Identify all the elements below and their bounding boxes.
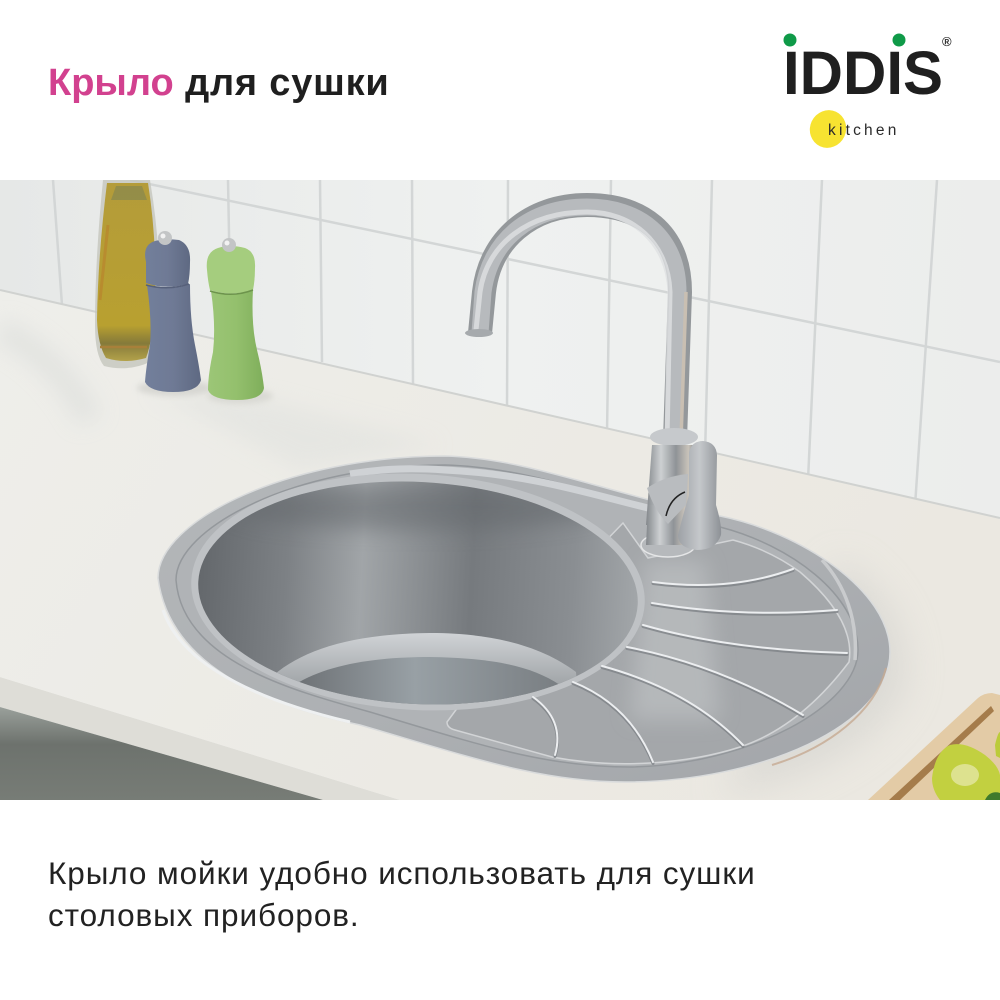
bowl — [192, 474, 645, 710]
oil bottle — [95, 180, 160, 368]
description text: столовых приборов. — [48, 897, 360, 933]
pepper mill: green — [207, 238, 273, 404]
drainboard wing — [447, 523, 850, 764]
description text: Крыло мойки удобно использовать для сушки — [48, 855, 756, 891]
countertop — [0, 290, 1000, 800]
sink rim — [158, 456, 890, 782]
brand logo: IDDIS kitchen: kitchen — [828, 122, 900, 139]
title: Крыло для сушки — [48, 62, 390, 104]
wall tiles — [0, 180, 1000, 530]
brand logo: IDDIS kitchen: ® — [942, 34, 952, 49]
brand logo: IDDIS kitchen — [783, 34, 952, 148]
sink shadow — [720, 560, 906, 795]
cutting board with peppers — [868, 693, 1000, 800]
photo: kitchen sink with faucet — [0, 180, 1000, 800]
drying grooves — [533, 569, 847, 764]
faucet — [465, 205, 721, 557]
description text — [48, 855, 756, 933]
brand logo: IDDIS kitchen: IDDIS — [783, 39, 943, 107]
pepper mill: blue — [137, 231, 213, 396]
